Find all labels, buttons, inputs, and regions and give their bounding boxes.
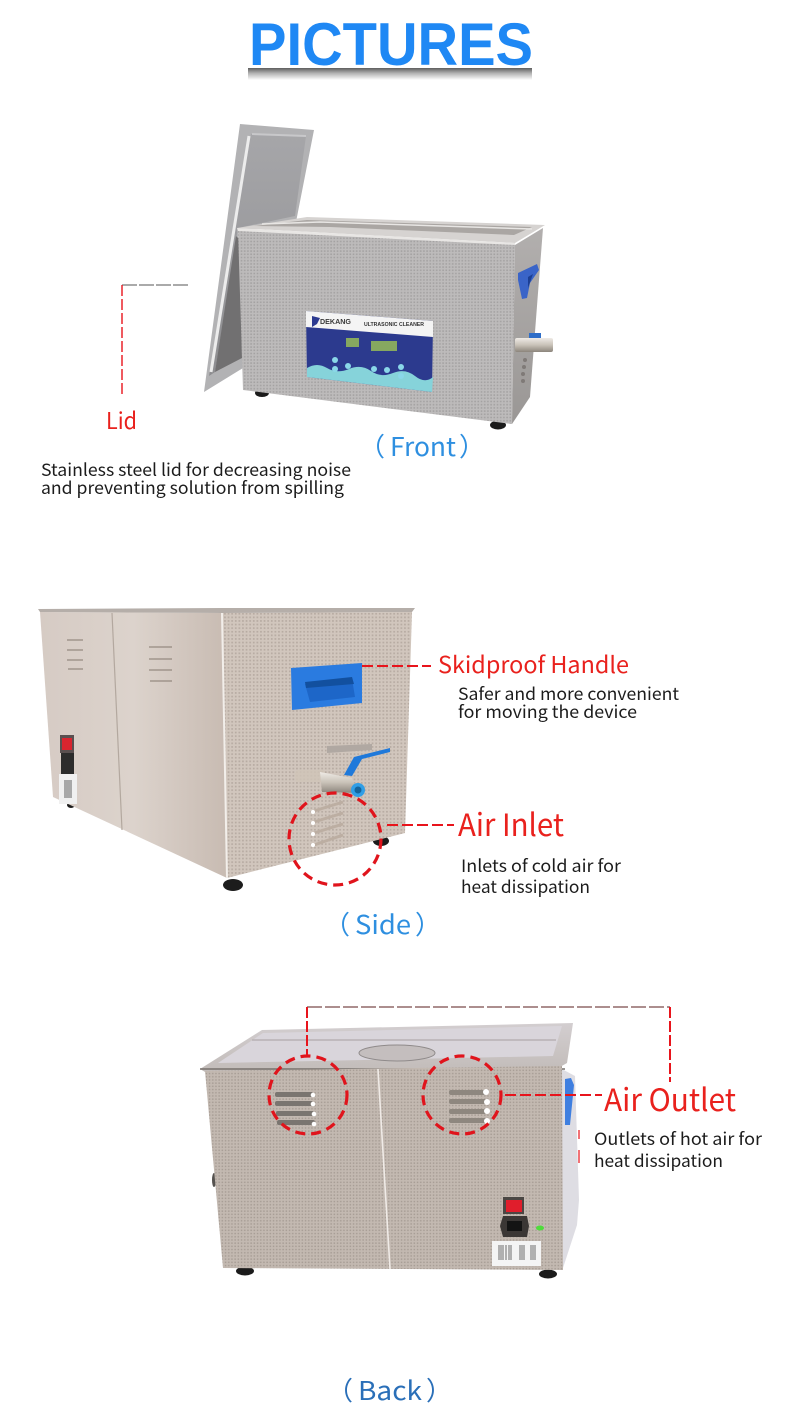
lid: [204, 124, 314, 392]
side vents: [521, 358, 527, 383]
drain valve: [515, 333, 553, 352]
power switch and socket: [500, 1197, 529, 1237]
caption: Front: （: [359, 427, 385, 464]
front face: [205, 1066, 563, 1270]
top rim: [38, 608, 415, 613]
text: air inlet description: [461, 852, 621, 898]
label: Skidproof Handle: Skidproof Handle: [438, 646, 629, 680]
power socket and barcode: [59, 735, 77, 804]
control panel: [306, 311, 433, 392]
icon: blue handle: [518, 264, 539, 299]
text: lid description: and preventing solution from spilling: [41, 474, 344, 499]
caption: Side: ）: [415, 905, 441, 942]
barcode label: [492, 1241, 541, 1266]
text: handle description: [458, 680, 680, 723]
control panel: DEKANG: [320, 319, 352, 326]
caption: Side: Side: [355, 905, 411, 942]
text: handle description: for moving the device: [458, 698, 637, 723]
text: air inlet description: Inlets of cold air for: [461, 852, 621, 877]
air inlet circle: [289, 793, 381, 885]
feet: [255, 389, 506, 430]
control panel: ULTRASONIC CLEANER: [364, 322, 424, 328]
feet: [212, 1173, 557, 1278]
panel: back view of cleaner: [200, 1023, 579, 1278]
text: handle description: Safer and more convenient: [458, 680, 680, 705]
text: air outlet description: heat dissipation: [594, 1147, 723, 1172]
caption: Side: （: [324, 905, 350, 942]
panel: front view of cleaner: [204, 124, 553, 430]
label: Lid: Lid: [106, 402, 137, 436]
vents right: [449, 1089, 490, 1124]
caption: Front: ）: [459, 427, 485, 464]
icon: blue handle: [291, 663, 362, 710]
vents left: [275, 1092, 316, 1126]
caption: Front: Front: [390, 427, 456, 464]
title: PICTURES: PICTURES: [249, 11, 533, 78]
air outlet circles: [269, 1056, 501, 1134]
drain valve: [295, 744, 390, 797]
text: lid description: [41, 456, 351, 499]
vents left: [67, 640, 172, 681]
text: air outlet description: Outlets of hot air for: [594, 1125, 762, 1150]
text: air outlet description: [594, 1125, 762, 1172]
callout: handle leader line: [362, 665, 431, 667]
label: Air Outlet: Air Outlet: [604, 1075, 736, 1120]
text: air inlet description: heat dissipation: [461, 873, 590, 898]
label: Air Inlet: Air Inlet: [458, 800, 564, 845]
panel: side view of cleaner: [38, 608, 415, 891]
back and long side: [40, 612, 227, 878]
tub rim: [237, 217, 545, 247]
callout: lid leader line: [122, 285, 189, 396]
text: lid description: Stainless steel lid for decreasing noise: [41, 456, 351, 481]
air inlet vents: [311, 802, 343, 847]
callout: air outlet leader lines: [307, 1007, 670, 1163]
side strip and blue handle: [560, 1068, 579, 1268]
front face: [238, 231, 515, 424]
right dimpled face: [222, 612, 412, 878]
callout: air inlet leader line: [387, 824, 454, 826]
lid top: [200, 1023, 573, 1072]
indicator light: [536, 1226, 544, 1230]
right side face: [512, 228, 543, 424]
feet: [67, 802, 389, 891]
